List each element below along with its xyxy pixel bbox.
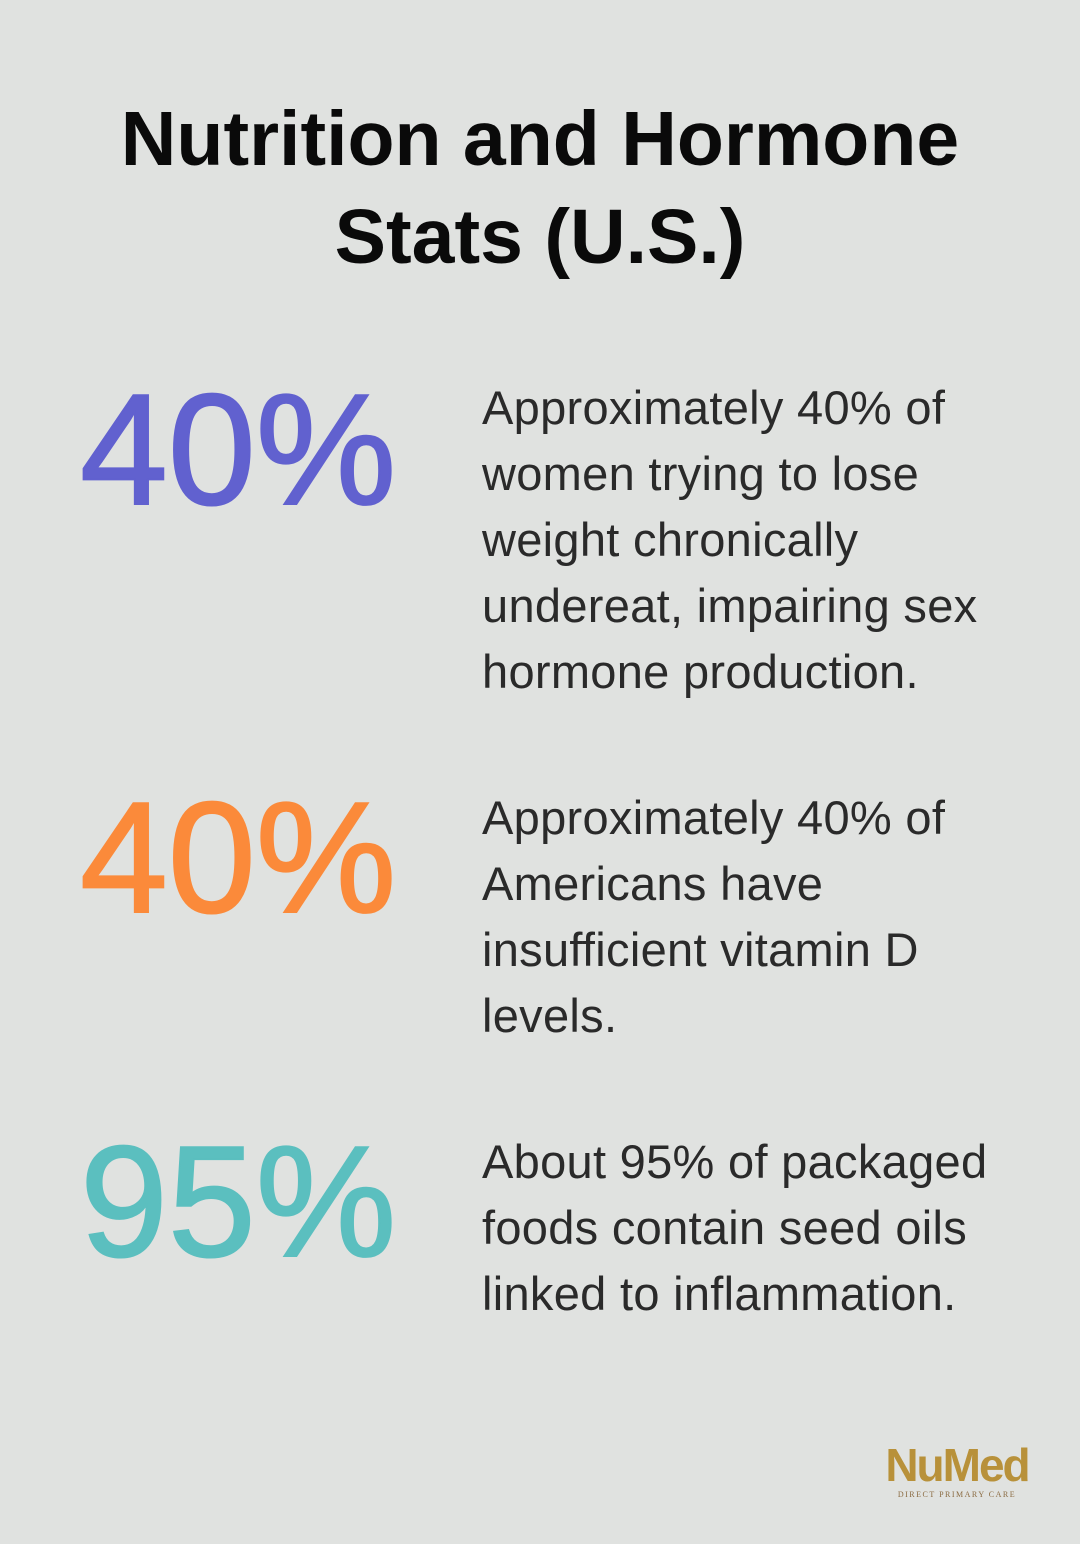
stat 1 text: hormone production. <box>482 645 919 698</box>
stat 3 text: foods contain seed oils <box>482 1201 967 1254</box>
stat 3 number: 95% <box>80 1114 396 1290</box>
stat 1 text: Approximately 40% of <box>482 381 945 434</box>
stat 2 text: insufficient vitamin D <box>482 923 919 976</box>
stat 1 text: women trying to lose <box>482 447 919 500</box>
stat 2 text <box>482 791 945 1042</box>
title: Stats (U.S.) <box>335 194 745 280</box>
logo: DIRECT PRIMARY CARE <box>898 1490 1016 1499</box>
title <box>121 96 959 280</box>
logo: NuMed <box>885 1439 1029 1491</box>
stat 1 text: undereat, impairing sex <box>482 579 977 632</box>
stat 3 text: linked to inflammation. <box>482 1267 957 1320</box>
title: Nutrition and Hormone <box>121 96 959 182</box>
stat 2 text: Americans have <box>482 857 823 910</box>
stat 2 number: 40% <box>80 770 396 946</box>
stat 3 text: About 95% of packaged <box>482 1135 987 1188</box>
stat 3 text <box>482 1135 987 1320</box>
stat 1 text: weight chronically <box>482 513 858 566</box>
stat 1 text <box>482 381 977 698</box>
stat 1 number: 40% <box>80 362 396 538</box>
stat 2 text: levels. <box>482 989 617 1042</box>
stat 2 text: Approximately 40% of <box>482 791 945 844</box>
